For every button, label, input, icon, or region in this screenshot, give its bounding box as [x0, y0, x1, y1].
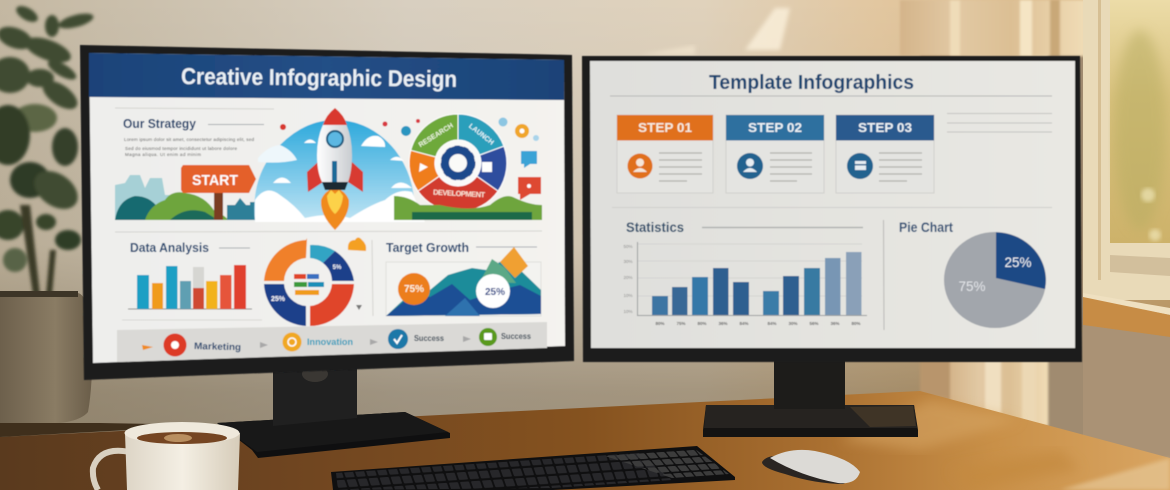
process wheel: DEVELOPMENT	[433, 188, 486, 199]
statistics bar chart: 36%	[830, 321, 840, 326]
screen	[590, 61, 1075, 348]
target growth chart: 25%	[485, 287, 505, 298]
pie chart: Pie Chart	[899, 219, 953, 235]
legend: marketing: Marketing	[194, 341, 241, 353]
legend: marketing	[142, 334, 241, 356]
statistics bar chart: 30%	[788, 321, 798, 326]
step 01 card: STEP 01	[638, 120, 692, 135]
plant pot	[0, 293, 92, 424]
illustration: skyline and trees	[115, 175, 282, 220]
step 03 card	[836, 115, 934, 193]
donut chart	[264, 238, 366, 326]
statistics bar chart: 80%	[851, 321, 861, 326]
step 02 card: STEP 02	[748, 120, 802, 135]
legend: success: Success	[414, 333, 444, 343]
statistics bar chart: 30%	[623, 259, 633, 264]
statistics bar chart: 84%	[739, 321, 749, 326]
pie chart: 25%	[1004, 255, 1032, 270]
statistics bar chart: Statistics	[626, 219, 684, 235]
divider	[115, 231, 542, 232]
statistics bar chart: 20%	[623, 275, 633, 280]
data analysis bar chart: Data Analysis	[130, 241, 209, 255]
bezel	[80, 45, 574, 380]
statistics bar chart: 56%	[809, 321, 819, 326]
pie chart: 75%	[958, 279, 986, 294]
divider	[372, 240, 373, 316]
donut chart: 5%	[333, 265, 342, 271]
pie chart	[899, 219, 1046, 328]
left monitor stand	[217, 365, 450, 458]
right monitor	[582, 56, 1082, 362]
step 01 card	[617, 115, 713, 193]
title banner: Creative Infographic Design	[181, 63, 457, 92]
keyboard	[331, 446, 735, 490]
strategy text block: Sed do eiusmod tempor incididunt ut labore dolore	[125, 146, 237, 151]
numpad keys	[605, 449, 729, 478]
statistics bar chart: 50%	[623, 244, 633, 249]
target growth chart: 75%	[404, 284, 424, 295]
mouse	[762, 450, 860, 484]
legend bar	[117, 322, 547, 362]
strategy text block: Our Strategy	[123, 117, 196, 131]
legend: success	[370, 329, 444, 349]
strategy text block	[115, 108, 274, 157]
target growth chart: Target Growth	[386, 241, 469, 255]
process wheel: RESEARCH	[418, 122, 455, 149]
statistics bar chart: 80%	[697, 321, 707, 326]
step 02 card	[726, 115, 824, 193]
statistics bar chart: 36%	[718, 321, 728, 326]
legend: success 2	[463, 328, 531, 346]
divider	[612, 206, 1052, 208]
strategy text block: Lorem ipsum dolor sit amet, consectetur adipiscing elit, sed	[124, 137, 254, 142]
process wheel: LAUNCH	[467, 123, 495, 147]
legend: success 2: Success	[501, 331, 531, 341]
coffee cup	[93, 422, 240, 490]
statistics bar chart: 10%	[623, 293, 633, 298]
statistics bar chart	[623, 219, 867, 326]
title banner	[89, 53, 564, 100]
start sign: START	[192, 172, 238, 189]
legend: innovation: Innovation	[307, 337, 353, 347]
right monitor stand	[703, 358, 918, 437]
table	[0, 391, 1170, 490]
statistics bar chart: 80%	[655, 321, 665, 326]
left monitor	[80, 45, 574, 380]
sky circle with clouds	[254, 120, 425, 222]
strategy text block: Magna aliqua. Ut enim ad minim	[125, 152, 201, 157]
curtain	[900, 0, 1088, 456]
process wheel	[409, 114, 507, 212]
data analysis bar chart	[122, 241, 262, 320]
window	[1083, 0, 1170, 470]
rocket	[307, 108, 363, 230]
statistics bar chart: 10%	[623, 309, 633, 314]
small icons around wheel	[280, 118, 542, 220]
target growth chart	[386, 241, 541, 316]
window sill	[1083, 297, 1170, 337]
plant	[0, 3, 95, 424]
title: Template Infographics	[709, 72, 914, 94]
screen	[89, 53, 565, 363]
start sign	[181, 165, 256, 220]
statistics bar chart: 84%	[767, 321, 777, 326]
legend: innovation	[260, 332, 353, 352]
donut chart: 25%	[271, 296, 286, 303]
divider	[882, 220, 885, 330]
step 03 card: STEP 03	[858, 120, 912, 135]
text lines placeholder	[947, 114, 1052, 132]
statistics bar chart: 75%	[676, 321, 686, 326]
bezel	[582, 56, 1082, 362]
